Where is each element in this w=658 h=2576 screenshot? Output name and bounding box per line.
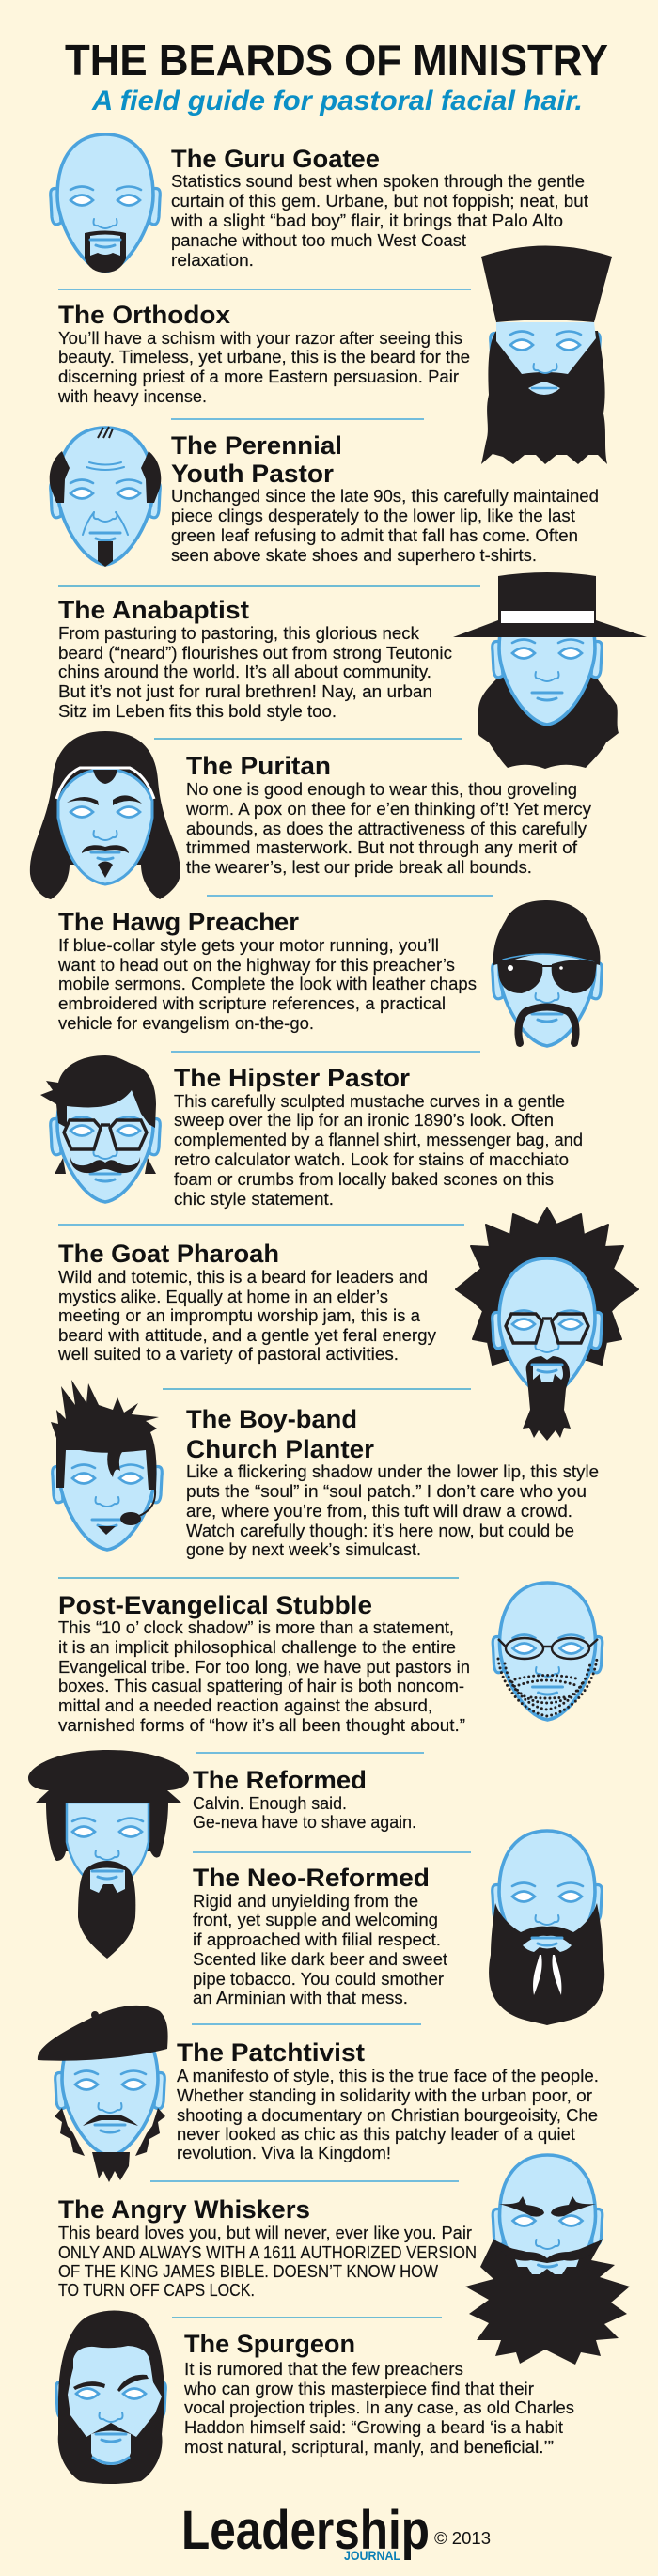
description: an Arminian with that mess. xyxy=(193,1989,408,2007)
description: You’ll have a schism with your razor after seeing this xyxy=(58,329,462,348)
description xyxy=(58,1618,470,1735)
description: gone by next week’s simulcast. xyxy=(186,1540,421,1559)
description: complemented by a flannel shirt, messenger bag, and xyxy=(174,1131,583,1149)
description: pipe tobacco. You could smother xyxy=(193,1970,444,1989)
panel: the neo-reformed xyxy=(193,1864,447,2007)
panel: the guru goatee xyxy=(170,145,588,270)
heading: The Anabaptist xyxy=(58,596,249,624)
description xyxy=(193,1892,447,2007)
description xyxy=(57,1268,436,1364)
description: Evangelical tribe. For too long, we have put pastors in xyxy=(58,1658,470,1677)
description: puts the “soul” in “soul patch.” I don’t care who you xyxy=(186,1482,587,1501)
description: Rigid and unyielding from the xyxy=(193,1892,418,1911)
panel: the goat pharoah xyxy=(57,1240,436,1364)
description xyxy=(58,2224,477,2300)
description: vocal projection triples. In any case, as old Charles xyxy=(184,2398,574,2417)
description: beauty. Timeless, yet urbane, this is the beard for the xyxy=(58,348,470,367)
description: Calvin. Enough said. xyxy=(193,1794,347,1813)
description: if approached with filial respect. xyxy=(193,1930,441,1949)
description: with a slight “bad boy” flair, it brings that Palo Alto xyxy=(170,211,563,230)
description: it is an implicit philosophical challenge to the entire xyxy=(58,1638,456,1657)
panel: the boy-band church planter xyxy=(186,1405,599,1559)
description: green leaf refusing to admit that fall has come. Often xyxy=(171,526,578,545)
description: OF THE KING JAMES BIBLE. DOESN’T KNOW HOW xyxy=(58,2262,438,2281)
description: If blue-collar style gets your motor running, you’ll xyxy=(58,936,439,955)
description: Wild and totemic, this is a beard for leaders and xyxy=(58,1268,428,1287)
heading xyxy=(171,431,342,488)
panel: the reformed xyxy=(193,1766,416,1832)
description: Scented like dark beer and sweet xyxy=(193,1950,447,1969)
heading: Youth Pastor xyxy=(171,460,335,488)
icon: reformed face xyxy=(28,1750,189,1959)
heading: The Hawg Preacher xyxy=(58,908,300,936)
description: Statistics sound best when spoken through the gentle xyxy=(171,172,585,191)
heading: The Boy-band xyxy=(186,1405,357,1433)
description: TO TURN OFF CAPS LOCK. xyxy=(58,2281,255,2300)
panel: the perennial youth pastor xyxy=(171,431,599,565)
description xyxy=(183,2360,574,2457)
description xyxy=(193,1794,416,1832)
description: Like a flickering shadow under the lower lip, this style xyxy=(186,1462,599,1481)
description: embroidered with scripture references, a practical xyxy=(58,994,446,1013)
description: No one is good enough to wear this, thou groveling xyxy=(186,780,577,799)
panel: the spurgeon xyxy=(183,2330,574,2457)
icon: neo-reformed face xyxy=(489,1831,604,2025)
description: It is rumored that the few preachers xyxy=(184,2360,463,2379)
heading: The Spurgeon xyxy=(184,2330,355,2358)
description: varnished forms of “how it’s all been thought about.” xyxy=(58,1716,465,1735)
description: A manifesto of style, this is the true face of the people. xyxy=(177,2067,599,2085)
description: revolution. Viva la Kingdom! xyxy=(177,2144,391,2162)
logo: leadership journal: JOURNAL xyxy=(344,2548,400,2563)
panel: post-evangelical stubble xyxy=(58,1591,470,1735)
description: abounds, as does the attractiveness of this carefully xyxy=(186,820,587,838)
description: seen above skate shoes and superhero t-shirts. xyxy=(171,546,537,565)
heading: The Angry Whiskers xyxy=(58,2195,310,2224)
heading: The Orthodox xyxy=(58,301,230,329)
description: beard (“neard”) flourishes out from strong Teutonic xyxy=(58,644,452,663)
description: mobile sermons. Complete the look with leather chaps xyxy=(58,975,477,993)
description: worm. A pox on thee for e’en thinking of’t! Yet mercy xyxy=(185,800,591,819)
icon: hipster pastor face xyxy=(40,1055,160,1202)
icon: orthodox face xyxy=(481,246,612,464)
heading: The Goat Pharoah xyxy=(58,1240,279,1268)
description: panache without too much West Coast xyxy=(171,231,466,250)
description: most natural, scriptural, manly, and beneficial.’” xyxy=(184,2438,554,2457)
description: From pasturing to pastoring, this glorious neck xyxy=(58,624,420,643)
description xyxy=(186,1462,599,1559)
description: mittal and a needed reaction against the absurd, xyxy=(58,1696,432,1715)
panel: the angry whiskers xyxy=(58,2195,477,2300)
description: sweep over the lip for an ironic 1890’s look. Often xyxy=(174,1111,554,1130)
icon: hawg preacher face xyxy=(493,900,602,1046)
heading: The Perennial xyxy=(171,431,342,460)
heading: Church Planter xyxy=(186,1435,374,1463)
description: the wearer’s, lest our pride break all bounds. xyxy=(186,858,532,877)
heading: The Guru Goatee xyxy=(171,145,380,173)
icon: boy-band church planter face xyxy=(51,1380,162,1550)
description: vehicle for evangelism on-the-go. xyxy=(58,1014,314,1033)
description: shooting a documentary on Christian bourgeoisity, Che xyxy=(177,2106,598,2125)
description xyxy=(57,936,477,1033)
copyright: © 2013 xyxy=(434,2529,491,2548)
description: This beard loves you, but will never, ever like you. Pair xyxy=(58,2224,472,2242)
description: retro calculator watch. Look for stains of macchiato xyxy=(174,1150,569,1169)
description: boxes. This casual spattering of hair is both noncom- xyxy=(58,1677,464,1695)
description: Sitz im Leben fits this bold style too. xyxy=(58,702,337,721)
icon: anabaptist face xyxy=(453,572,647,769)
icon: spurgeon face xyxy=(56,2310,165,2484)
description xyxy=(174,1092,583,1209)
heading: The Neo-Reformed xyxy=(193,1864,430,1892)
panel: the anabaptist xyxy=(58,596,452,721)
description: discerning priest of a more Eastern persuasion. Pair xyxy=(58,367,459,386)
description xyxy=(58,624,452,721)
description: ONLY AND ALWAYS WITH A 1611 AUTHORIZED VERSION xyxy=(58,2243,477,2262)
description: trimmed masterwork. But not through any merit of xyxy=(186,838,578,857)
heading: Post-Evangelical Stubble xyxy=(58,1591,372,1619)
icon: goat pharoah face xyxy=(456,1208,638,1441)
description: chic style statement. xyxy=(174,1190,334,1209)
description: Unchanged since the late 90s, this carefully maintained xyxy=(171,487,599,506)
icon: guru goatee face xyxy=(51,134,160,273)
panel: the hawg preacher xyxy=(57,908,477,1033)
description: never looked as chic as this patchy leader of a quiet xyxy=(177,2125,575,2144)
description: beard with attitude, and a gentle yet feral energy xyxy=(58,1326,436,1345)
description: with heavy incense. xyxy=(57,387,207,406)
panel: the hipster pastor xyxy=(174,1064,583,1209)
description xyxy=(170,172,588,270)
description: chins around the world. It’s all about community. xyxy=(58,663,431,681)
description: are, where you’re from, this tuft will draw a crowd. xyxy=(186,1502,572,1521)
description: This “10 o’ clock shadow” is more than a statement, xyxy=(58,1618,454,1637)
description xyxy=(185,780,591,877)
logo: leadership journal: Leadership xyxy=(181,2500,430,2561)
description: well suited to a variety of pastoral activities. xyxy=(57,1345,399,1364)
heading: The Hipster Pastor xyxy=(174,1064,411,1092)
description: This carefully sculpted mustache curves in a gentle xyxy=(174,1092,565,1111)
description: Haddon himself said: “Growing a beard ‘is a habit xyxy=(184,2418,563,2437)
description: who can grow this masterpiece find that their xyxy=(183,2380,534,2398)
description xyxy=(57,329,470,406)
icon: perennial youth pastor face xyxy=(50,427,161,567)
description: want to head out on the highway for this preacher’s xyxy=(57,956,455,975)
description: foam or crumbs from locally baked scones on this xyxy=(174,1170,554,1189)
description: But it’s not just for rural brethren! Nay, an urban xyxy=(58,682,432,701)
heading: The Patchtivist xyxy=(177,2038,365,2067)
title: THE BEARDS OF MINISTRY xyxy=(65,36,608,85)
heading: The Reformed xyxy=(193,1766,367,1794)
description: Whether standing in solidarity with the urban poor, or xyxy=(177,2086,592,2105)
description: front, yet supple and welcoming xyxy=(193,1911,438,1929)
subtitle: A field guide for pastoral facial hair. xyxy=(91,86,583,117)
description: Ge-neva have to shave again. xyxy=(193,1813,416,1832)
panel: the puritan xyxy=(185,752,591,877)
panel: the patchtivist xyxy=(177,2038,599,2162)
heading xyxy=(186,1405,374,1463)
panel: the orthodox xyxy=(57,301,470,406)
description: curtain of this gem. Urbane, but not foppish; neat, but xyxy=(171,192,588,211)
description: mystics alike. Equally at home in an elder’s xyxy=(58,1288,388,1306)
description: relaxation. xyxy=(171,251,254,270)
description: meeting or an impromptu worship jam, this is a xyxy=(58,1306,421,1325)
icon: stubble face xyxy=(493,1583,603,1720)
icon: puritan face xyxy=(30,731,180,899)
description: piece clings desperately to the lower lip, like the last xyxy=(171,507,575,525)
description xyxy=(177,2067,599,2162)
icon: angry whiskers face xyxy=(465,2155,630,2365)
heading: The Puritan xyxy=(186,752,331,780)
icon: patchtivist face xyxy=(38,2006,168,2182)
description xyxy=(171,487,599,565)
description: Watch carefully though: it’s here now, but could be xyxy=(186,1522,574,1540)
